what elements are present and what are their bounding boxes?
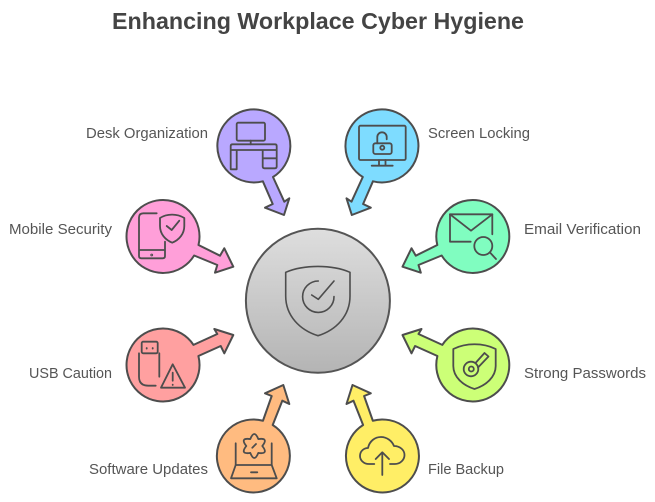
icon: desk with monitor [231,123,277,169]
icon: shield with key [453,344,496,389]
node: software updates [217,385,290,492]
icon: cloud upload [360,437,404,475]
label: usb caution: USB Caution [29,365,112,382]
node: desk organization [217,109,290,215]
node: email verification [402,200,509,273]
icon: phone with shield check [139,213,184,258]
circle and arrow: mobile security [127,200,233,273]
label: desk organization: Desk Organization [86,125,208,142]
circle and arrow: screen locking [345,109,418,215]
label: software updates: Software Updates [89,461,208,478]
node: file backup [346,385,419,492]
circle and arrow: usb caution [127,328,233,401]
icon: usb drive with warning [139,342,185,388]
node: strong passwords [402,328,509,401]
label: email verification: Email Verification [524,221,641,238]
label: file backup: File Backup [428,461,504,478]
circle and arrow: software updates [217,385,290,492]
circle and arrow: email verification [402,200,509,273]
central hub: shield with check [246,229,390,373]
label: screen locking: Screen Locking [428,125,530,142]
icon: envelope with magnifier [450,214,496,259]
title: Enhancing Workplace Cyber Hygiene [112,8,524,34]
label: mobile security: Mobile Security [9,221,112,238]
icon: monitor with open lock [359,126,406,166]
label: strong passwords: Strong Passwords [524,365,646,382]
circle and arrow: file backup [346,385,419,492]
circle and arrow: strong passwords [402,328,509,401]
circle and arrow: desk organization [217,109,290,215]
node: mobile security [127,200,233,273]
icon: laptop with gear [231,434,277,478]
node: usb caution [127,328,233,401]
node: screen locking [345,109,418,215]
